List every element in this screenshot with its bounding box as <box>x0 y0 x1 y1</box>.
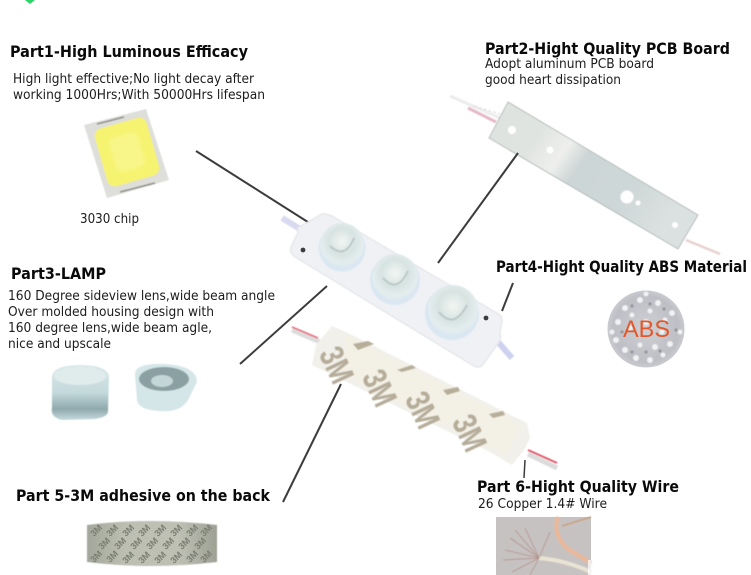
icon: 3M tape roll: 3M <box>152 522 168 538</box>
icon: 3M tape roll: 3M <box>120 549 136 565</box>
icon: 3M tape roll: 3M <box>176 535 192 551</box>
icon: 3M logos: 3M <box>311 341 361 390</box>
text: part 2 description <box>485 57 654 88</box>
icon: 3M logos: 3M <box>354 364 404 413</box>
text: part 3 description <box>8 289 275 352</box>
leader line: part 1 <box>196 151 322 231</box>
heading: part 6: Part 6-Hight Quality Wire <box>477 477 679 496</box>
panel: part 3 lamp <box>8 264 275 420</box>
leader line: part 2 <box>438 153 518 263</box>
icon: ABS pellets <box>608 290 684 368</box>
icon: lamp lens back <box>135 364 197 411</box>
text: part 3 description: 160 degree lens,wide beam agle, <box>8 321 212 336</box>
icon: lamp lens front <box>52 365 109 420</box>
icon: module housing <box>290 214 502 367</box>
icon: 3M adhesive strip <box>340 334 520 456</box>
panel: 3M backed module <box>292 326 557 468</box>
label: ABS: ABS <box>623 316 670 343</box>
icon: back module wires <box>292 327 557 468</box>
icon: green corner mark <box>25 0 35 4</box>
leader line: part 5 <box>283 384 341 502</box>
text: part 3 description: Over molded housing design with <box>8 305 214 320</box>
icon: back module housing <box>312 326 530 465</box>
icon: PCB wires <box>450 96 720 254</box>
icon: 3M logos <box>311 341 494 458</box>
text: part 1 description <box>13 72 265 103</box>
icon: housing screw holes <box>301 248 488 320</box>
icon: aluminium PCB <box>489 102 698 249</box>
icon: 3M tape roll: 3M <box>136 522 152 538</box>
icon: 3M tape roll: 3M <box>184 522 200 538</box>
panel: part 1 high luminous efficacy <box>10 42 265 227</box>
icon: 3M tape roll: 3M <box>192 535 208 551</box>
icon: 3M tape roll: 3M <box>104 522 120 538</box>
icon: 3M tape roll: 3M <box>136 549 152 565</box>
heading: part 3: Part3-LAMP <box>11 264 106 283</box>
text: part 3 description: nice and upscale <box>8 337 111 352</box>
icon: module wires <box>282 218 512 358</box>
panel: central LED module with lenses <box>282 214 512 367</box>
text: part 3 description: 160 Degree sideview lens,wide beam angle <box>8 289 275 304</box>
panel: part 5 3M adhesive <box>16 384 341 566</box>
text: part 2 description: good heart dissipation <box>485 73 621 88</box>
icon: 3M tape roll: 3M <box>88 548 104 564</box>
icon: 3M tape roll: 3M <box>88 522 104 538</box>
icon: tape edge marks <box>353 341 505 418</box>
icon: 3M tape roll: 3M <box>128 535 144 551</box>
icon: 3M tape roll: 3M <box>184 548 200 564</box>
icon: 3M tape roll: 3M <box>198 522 214 538</box>
text: part 1 description: High light effective;No light decay after <box>13 72 255 87</box>
image: copper wire photo <box>496 517 591 575</box>
panel: part 6 wire <box>477 460 679 575</box>
text: part 1 description: working 1000Hrs;With 50000Hrs lifespan <box>13 88 265 103</box>
icon: 3M tape roll: 3M <box>160 535 176 551</box>
text: part 2 description: Adopt aluminum PCB board <box>485 57 654 72</box>
icon: lens 3 <box>425 285 479 340</box>
label: 3030 chip: 3030 chip <box>80 212 139 227</box>
icon: 3M tape roll: 3M <box>168 522 184 538</box>
panel: part 2 PCB board <box>450 39 730 254</box>
icon: 3M tape roll: 3M <box>152 549 168 565</box>
icon: 3M logos: 3M <box>444 409 494 458</box>
icon: 3M tape roll: 3M <box>112 535 128 551</box>
icon: lens 1 <box>318 223 366 272</box>
icon: 3M tape roll: 3M <box>168 549 184 565</box>
icon: 3M logos: 3M <box>397 386 447 435</box>
leader line: part 6 <box>524 460 525 478</box>
icon: 3M tape roll: 3M <box>104 548 120 564</box>
icon: 3M tape roll: 3M <box>198 548 214 564</box>
icon: 3030 chip <box>84 109 169 198</box>
heading: part 1: Part1-High Luminous Efficacy <box>10 42 249 61</box>
icon: 3M tape roll: 3M <box>120 522 136 538</box>
icon: 3M tape roll <box>87 521 217 566</box>
icon: 3M tape roll: 3M <box>96 535 112 551</box>
leader line: part 3 <box>240 286 327 364</box>
icon: lens 2 <box>370 254 420 305</box>
icon: 3M tape roll: 3M <box>144 535 160 551</box>
heading: part 5: Part 5-3M adhesive on the back <box>16 486 270 505</box>
panel: part 4 ABS material <box>496 257 747 368</box>
text: part 6 description: 26 Copper 1.4# Wire <box>478 497 607 512</box>
leader line: part 4 <box>502 283 513 311</box>
